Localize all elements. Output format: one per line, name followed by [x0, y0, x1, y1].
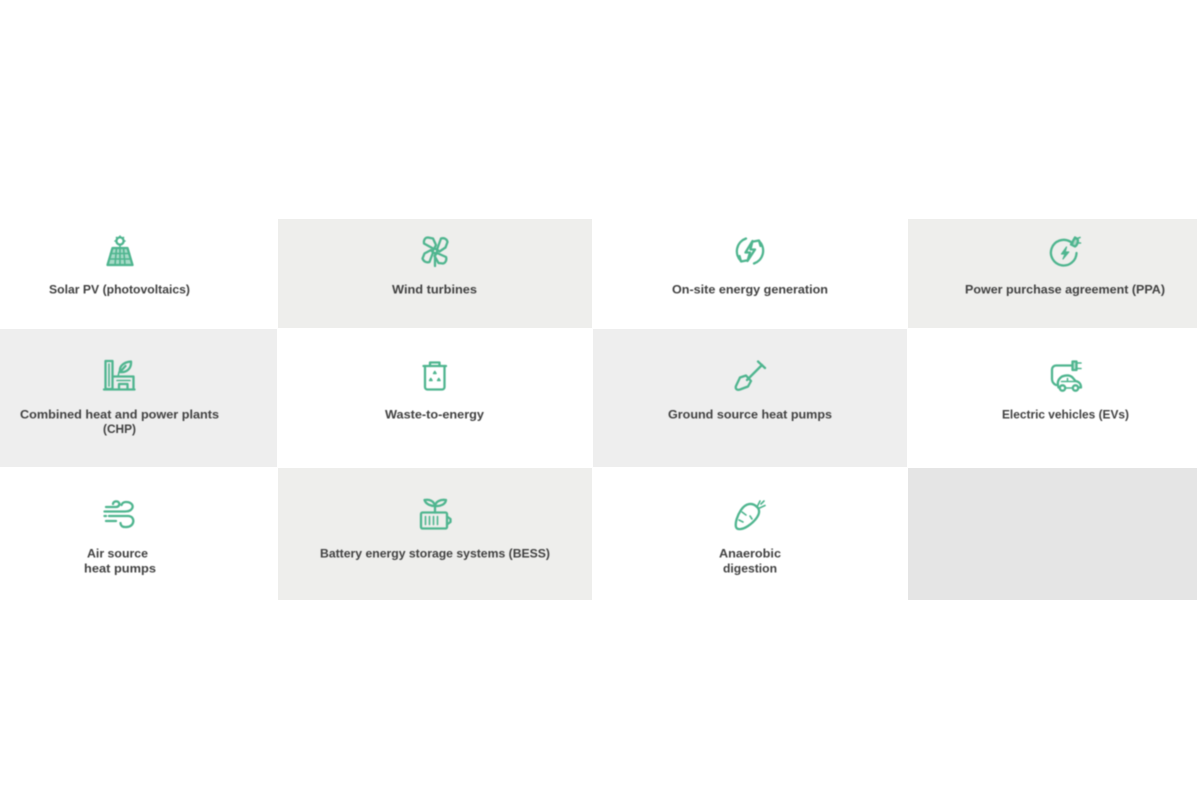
label: digestion: digestion [723, 562, 777, 576]
icon: recycling waste bin [424, 362, 446, 390]
label: electric vehicles: Electric vehicles (EVs) [1002, 408, 1129, 422]
icon: wind turbine pinwheel [422, 238, 448, 266]
icon: electric vehicle with plug [1052, 362, 1081, 391]
panel: combined heat and power background [0, 329, 277, 467]
icon: power plug with bolt [1051, 238, 1080, 265]
label: anaerobic: Anaerobic [719, 546, 781, 560]
panel: ground source heat pumps background [593, 329, 907, 467]
label: wind turbines: Wind turbines [392, 282, 477, 296]
icon: shovel [736, 362, 765, 390]
label: waste-to-energy: Waste-to-energy [385, 408, 484, 422]
panel: wind turbines background [278, 219, 592, 328]
label: on-site energy generation: On-site energy generation [672, 282, 828, 296]
label: solar pv: Solar PV (photovoltaics) [49, 282, 190, 296]
icon: air source wind lines [104, 501, 133, 527]
icon: on-site energy generation [737, 238, 763, 264]
icon: carrot [736, 501, 765, 529]
icon: combined heat and power plant [104, 361, 134, 390]
label: ground source heat pumps: Ground source heat pumps [668, 408, 832, 422]
label: heat pumps: heat pumps [84, 562, 156, 576]
panel: battery energy storage background [278, 468, 592, 600]
icon: solar panel with sun [108, 236, 132, 265]
label: power purchase agreement: Power purchase agreement (PPA) [965, 282, 1165, 296]
label: combined heat and power plants: Combined heat and power plants [20, 408, 219, 422]
label: battery energy storage systems: Battery energy storage systems (BESS) [320, 546, 550, 560]
panel: power purchase agreement background [908, 219, 1197, 328]
panel: empty grey cell [908, 468, 1197, 600]
label: chp: (CHP) [103, 422, 136, 436]
icon: battery with sprout [421, 500, 450, 528]
label: air source: Air source [87, 546, 148, 560]
